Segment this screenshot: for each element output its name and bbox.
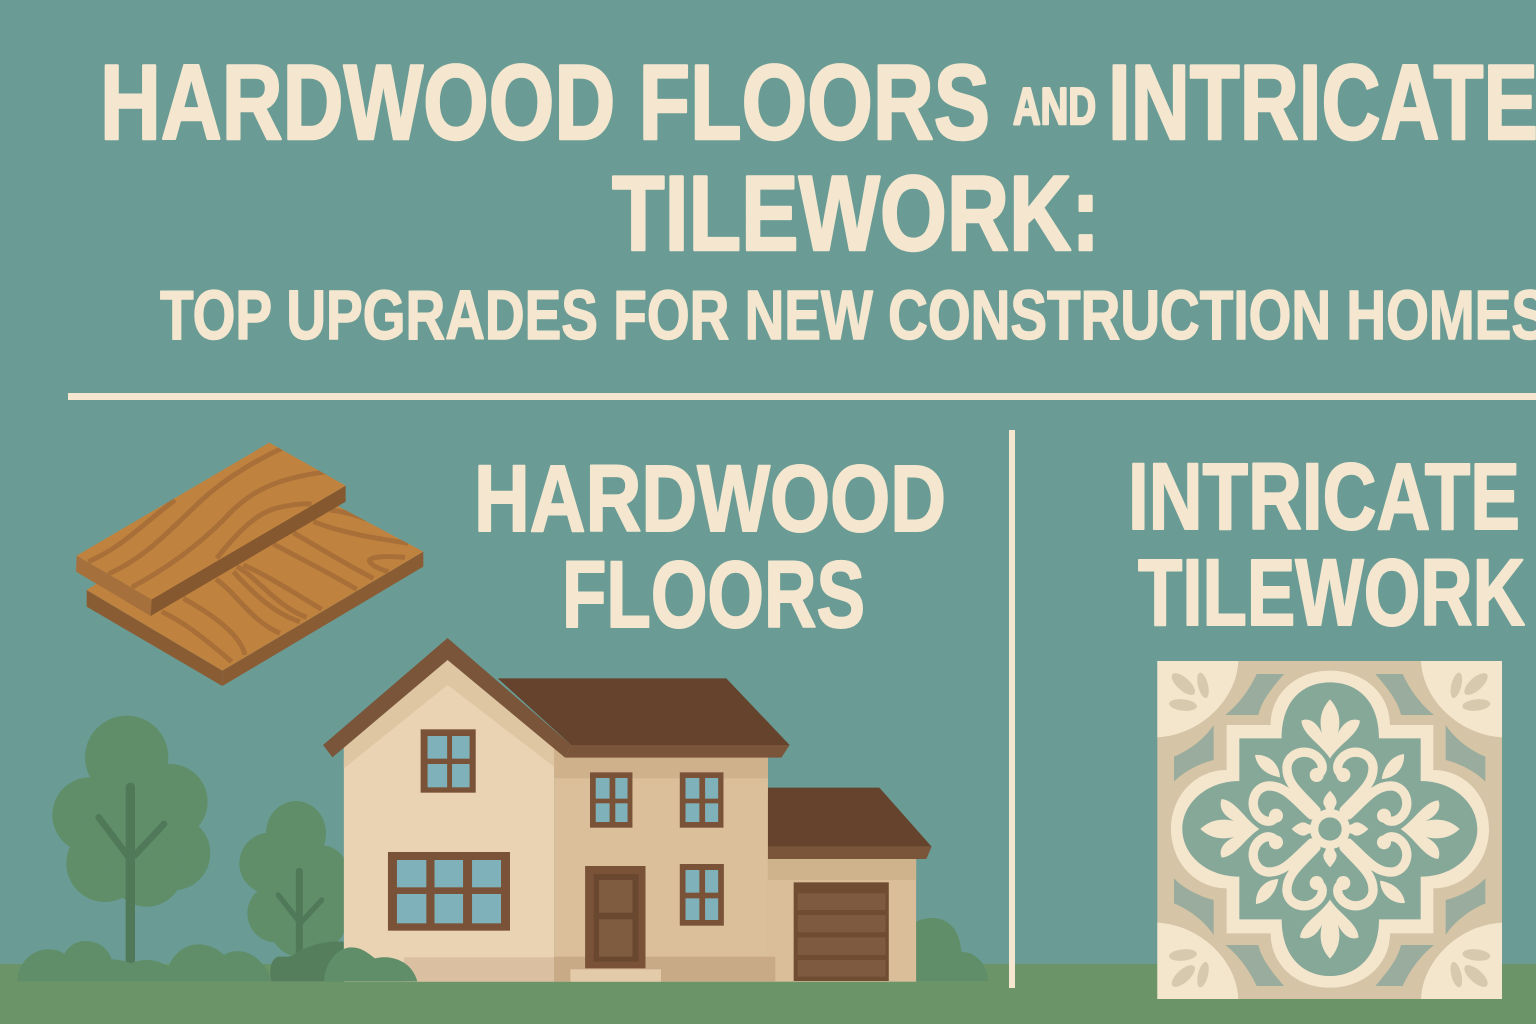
heading: intricate tilework xyxy=(1128,444,1525,646)
front door xyxy=(585,866,646,968)
shrub row left xyxy=(17,941,271,981)
ground xyxy=(0,964,1536,1024)
tree: large xyxy=(52,716,210,963)
garage door xyxy=(794,882,889,981)
door step xyxy=(570,969,661,982)
title xyxy=(100,42,1536,273)
tile ornament xyxy=(1200,699,1460,959)
window: gable xyxy=(421,729,476,793)
window: upper right xyxy=(680,772,723,828)
house xyxy=(323,638,932,982)
heading: hardwood floors: FLOORS xyxy=(562,542,865,648)
tree: small xyxy=(239,801,352,963)
lower plank xyxy=(86,498,424,686)
bush behind garage xyxy=(910,918,988,981)
shrub front of house xyxy=(324,947,417,981)
window: large xyxy=(388,852,510,931)
title connector: and: AND xyxy=(1013,78,1096,136)
trees xyxy=(52,716,352,963)
shrubs xyxy=(17,941,417,981)
decorative tile xyxy=(1157,661,1502,999)
shrub dark xyxy=(270,941,344,981)
icon: wood planks xyxy=(76,443,423,686)
house walls xyxy=(344,660,916,982)
title line two: tilework: TILEWORK: xyxy=(612,153,1100,273)
heading: hardwood floors: HARDWOOD xyxy=(474,446,946,552)
tile base xyxy=(1157,661,1502,999)
tile corners xyxy=(1157,661,1502,999)
tile quatrefoil field xyxy=(1182,682,1477,976)
window: lower right xyxy=(680,864,724,926)
upper plank xyxy=(76,443,346,616)
heading: hardwood floors xyxy=(474,446,946,648)
window: upper left xyxy=(590,772,632,828)
house roof xyxy=(323,638,932,859)
title line one: hardwood floors: HARDWOOD FLOORS xyxy=(100,42,990,162)
tile quatrefoil border xyxy=(1171,671,1489,988)
